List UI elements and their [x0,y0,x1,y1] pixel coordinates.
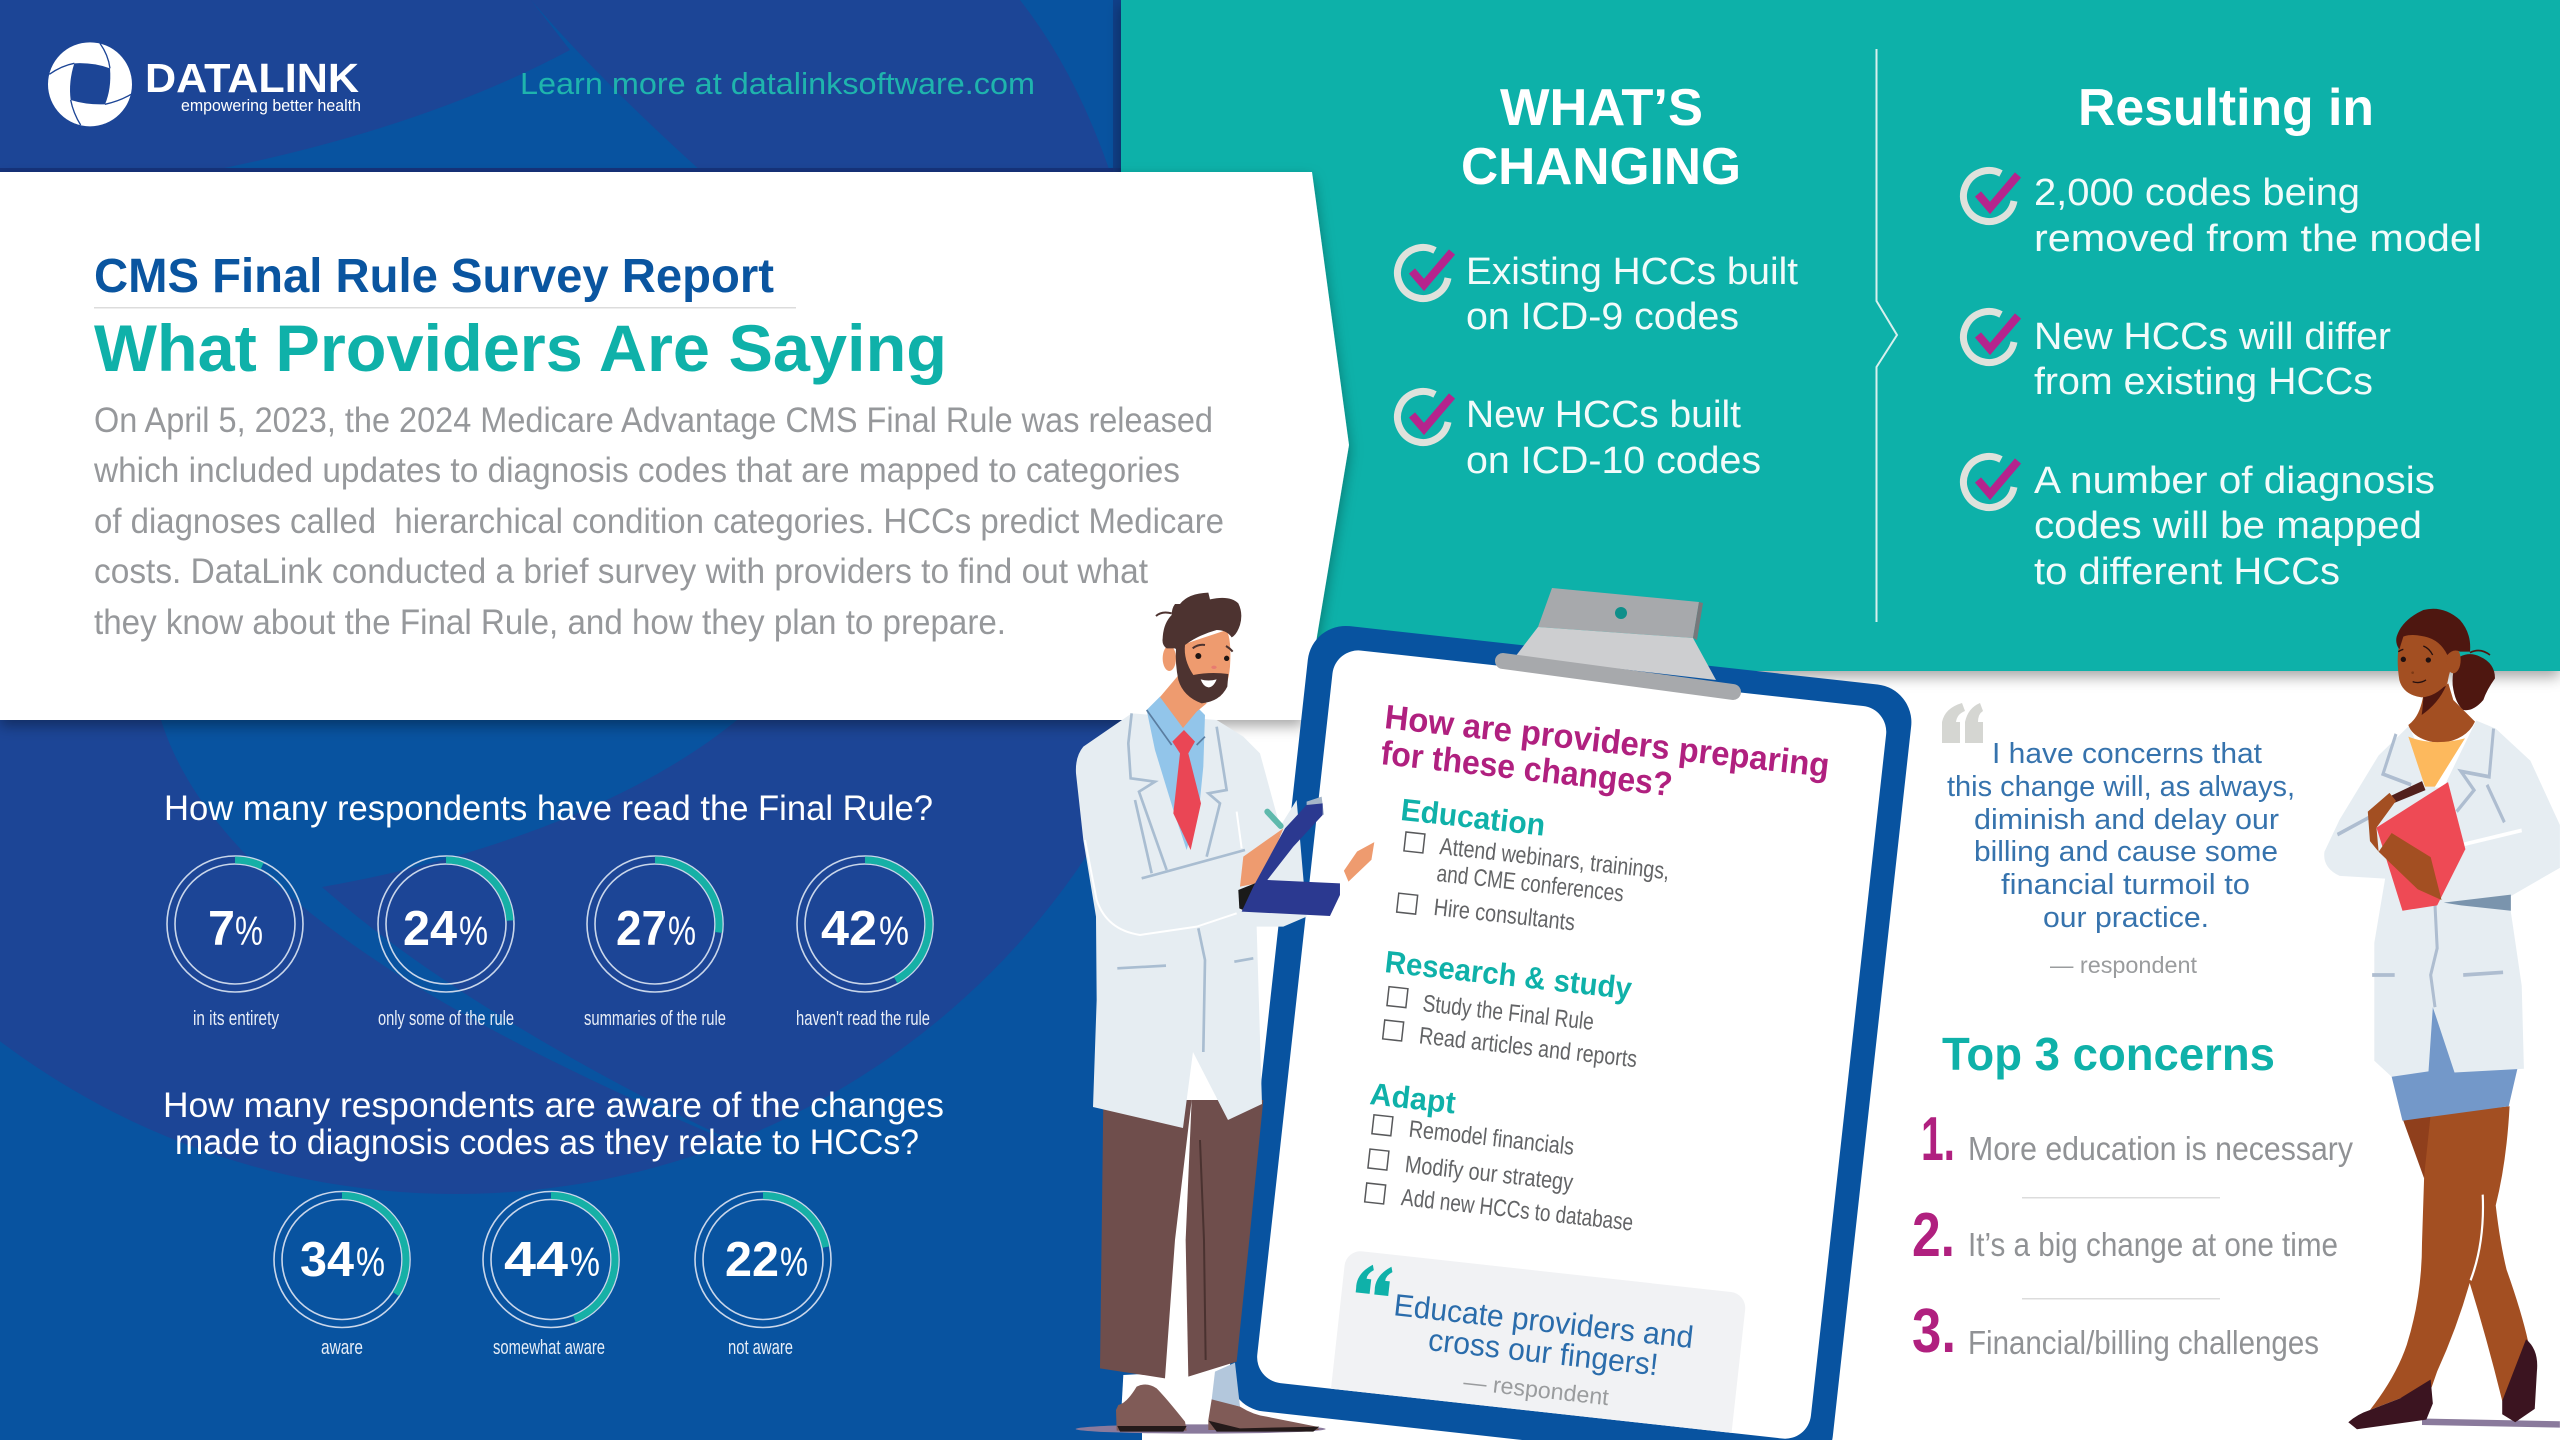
intro paragraph: costs. DataLink conducted a brief survey with providers to find out what [94,552,1148,591]
section: education: Hire consultants [1432,894,1576,936]
panel: teal what's changing [1121,0,2560,671]
icon: clipboard metal clip [1503,588,1733,692]
list item: number of codes: A number of diagnosis [2034,460,2435,502]
donut: 22%: 22 [725,1233,779,1287]
doctor coat and torso [1076,697,1340,1128]
label: in its entirety: in its entirety [193,1008,279,1030]
question: aware of changes [163,1086,944,1162]
icon: gray quote mark [1942,703,1983,743]
divider arrow [1876,49,1897,622]
section: education: Attend webinars, trainings, [1438,833,1671,885]
quote text: financial turmoil to [2001,869,2250,901]
donut: 24% [378,856,514,992]
label: haven't read the rule: haven't read the rule [796,1008,930,1030]
icon: check 5 [1963,456,2018,507]
intro paragraph: they know about the Final Rule, and how they plan to prepare. [94,603,1006,642]
list item: 2,000 codes: 2,000 codes being [2034,172,2360,214]
donut: 44%: 44 [504,1233,568,1287]
label: aware: aware [321,1337,363,1359]
concern 2: It’s a big change at one time [1968,1226,2338,1263]
list item: new HCCs: on ICD-10 codes [1466,440,1761,482]
quote attribution: — respondent [2050,952,2198,978]
panel: white intro [0,172,1349,720]
panel: lower-left blue survey background [0,720,1142,1440]
label: somewhat aware: somewhat aware [493,1337,605,1359]
donut: 24%: 24 [403,902,457,956]
skirt [2392,1007,2517,1121]
heading: what's changing: WHAT’S [1500,79,1703,137]
list item: number of codes [2034,460,2435,593]
list item: number of codes: codes will be mapped [2034,505,2422,547]
clipboard paper [1254,648,1889,1440]
donut: 34%: 34 [300,1233,354,1287]
donut: 42% [797,856,933,992]
list item: new HCCs: New HCCs built [1466,394,1741,436]
doctor legs and shoes [1076,1100,1326,1434]
quote text: Educate providers and [1392,1287,1695,1355]
concern 3: 3. [1912,1297,1956,1366]
label: only some of the rule: only some of the rule [378,1008,514,1030]
icon: check 1 [1397,247,1452,298]
body [2324,721,2560,1429]
head, neck and shirt [2396,609,2495,787]
illustration: male doctor [1076,593,1374,1434]
quote attribution: — respondent [1462,1368,1611,1410]
label: not aware: not aware [728,1337,793,1359]
section: adapt [1358,1076,1646,1237]
donut: 44%: % [570,1239,600,1285]
quote text: cross our fingers! [1427,1322,1660,1382]
concern 2: 2. [1912,1201,1955,1270]
donut: 7% [167,856,303,992]
clipboard heading [1379,698,1831,821]
intro paragraph [93,401,1224,642]
label: summaries of the rule: summaries of the rule [584,1008,726,1030]
icon: check 4 [1963,311,2018,362]
callout box: respondent quote [1327,1250,1747,1440]
icon: DataLink logo mark [48,42,132,126]
red clipboard and hands [2368,781,2465,911]
clipboard board [1225,622,1915,1440]
quote text [1947,738,2295,934]
donut: 42%: % [879,908,909,954]
intro paragraph: which included updates to diagnosis codes that are mapped to categories [93,451,1180,490]
doctor fingers [1344,842,1374,882]
list item: existing HCCs [1466,251,1798,338]
section: adapt: Adapt [1368,1076,1457,1120]
list item: existing HCCs: Existing HCCs built [1466,251,1798,293]
heading: resulting in: Resulting in [2078,79,2374,137]
concern 1 [1921,1105,2353,1174]
legs [2370,1106,2528,1410]
section: education: Education [1399,792,1547,843]
concern 3: Financial/billing challenges [1968,1324,2319,1361]
heading: what providers are saying: What Providers Are Saying [94,311,947,385]
illustration: female doctor [2324,609,2560,1429]
header link text: Learn more at datalinksoftware.com [520,66,1035,101]
concern 1: 1. [1921,1105,1955,1174]
section: research and study: Study the Final Rule [1421,990,1595,1036]
donut: 22% [695,1192,831,1328]
intro paragraph: of diagnoses called hierarchical condition categories. HCCs predict Medicare [94,502,1224,541]
section: adapt: Modify our strategy [1404,1151,1574,1197]
section: research and study: Research & study [1383,944,1634,1006]
donut: 27%: 27 [616,902,667,956]
quote text: our practice. [2043,902,2209,934]
concern 3 [1912,1297,2319,1366]
doctor head [1156,593,1241,728]
donut: 34% [274,1192,410,1328]
donut: 27% [587,856,723,992]
question: read the final rule: How many respondents have read the Final Rule? [164,789,933,828]
quote text: I have concerns that [1992,738,2262,770]
icon: check 3 [1963,170,2018,221]
logo wordmark: DATALINK [145,55,359,101]
shoes [2348,1339,2537,1429]
concern 1: More education is necessary [1968,1130,2353,1167]
concern 2 [1912,1201,2338,1270]
section: education [1389,792,1675,946]
section: adapt: Remodel financials [1407,1116,1575,1161]
donut: 27%: % [668,908,696,954]
quote text [1395,1294,1693,1376]
section: research and study: Read articles and reports [1418,1022,1638,1073]
clipboard heading: for these changes? [1379,734,1674,804]
coat [2324,721,2560,1077]
list item: number of codes: to different HCCs [2034,551,2340,593]
heading: top 3 concerns: Top 3 concerns [1942,1028,2275,1080]
quote text: billing and cause some [1974,836,2278,868]
intro paragraph: On April 5, 2023, the 2024 Medicare Advantage CMS Final Rule was released [94,401,1213,440]
section: research and study [1376,944,1647,1073]
donut: 42%: 42 [821,902,877,956]
panel: header band [0,0,1135,172]
ground shadow [2422,1419,2560,1428]
donut: 7%: 7 [208,902,235,956]
heading: what's changing [1461,79,1741,196]
section: education: and CME conferences [1435,860,1625,908]
list item: new HCCs differ: from existing HCCs [2034,361,2373,403]
list item: new HCCs differ [2034,316,2391,403]
donut: 34%: % [356,1239,385,1285]
list item: existing HCCs: on ICD-9 codes [1466,296,1739,338]
donut: 24%: % [459,908,488,954]
list item: 2,000 codes [2034,172,2482,260]
logo wordmark: empowering better health [181,96,361,115]
list item: new HCCs [1466,394,1761,482]
heading: what's changing: CHANGING [1461,138,1741,196]
question: aware of changes: made to diagnosis codes as they relate to HCCs? [175,1123,919,1162]
list item: 2,000 codes: removed from the model [2034,218,2482,260]
heading: report title: CMS Final Rule Survey Report [94,250,774,303]
section: adapt: Add new HCCs to database [1400,1184,1634,1237]
panel: clipboard [1224,622,1915,1440]
list item: new HCCs differ: New HCCs will differ [2034,316,2391,358]
clipboard heading: How are providers preparing [1383,698,1831,785]
quote text: diminish and delay our [1974,804,2279,836]
quote text: this change will, as always, [1947,771,2295,803]
icon: teal quote mark [1356,1263,1393,1296]
donut: 44% [483,1192,619,1328]
icon: check 2 [1397,391,1452,442]
donut: 7%: % [235,908,263,954]
question: aware of changes: How many respondents are aware of the changes [163,1086,944,1125]
donut: 22%: % [780,1239,808,1285]
